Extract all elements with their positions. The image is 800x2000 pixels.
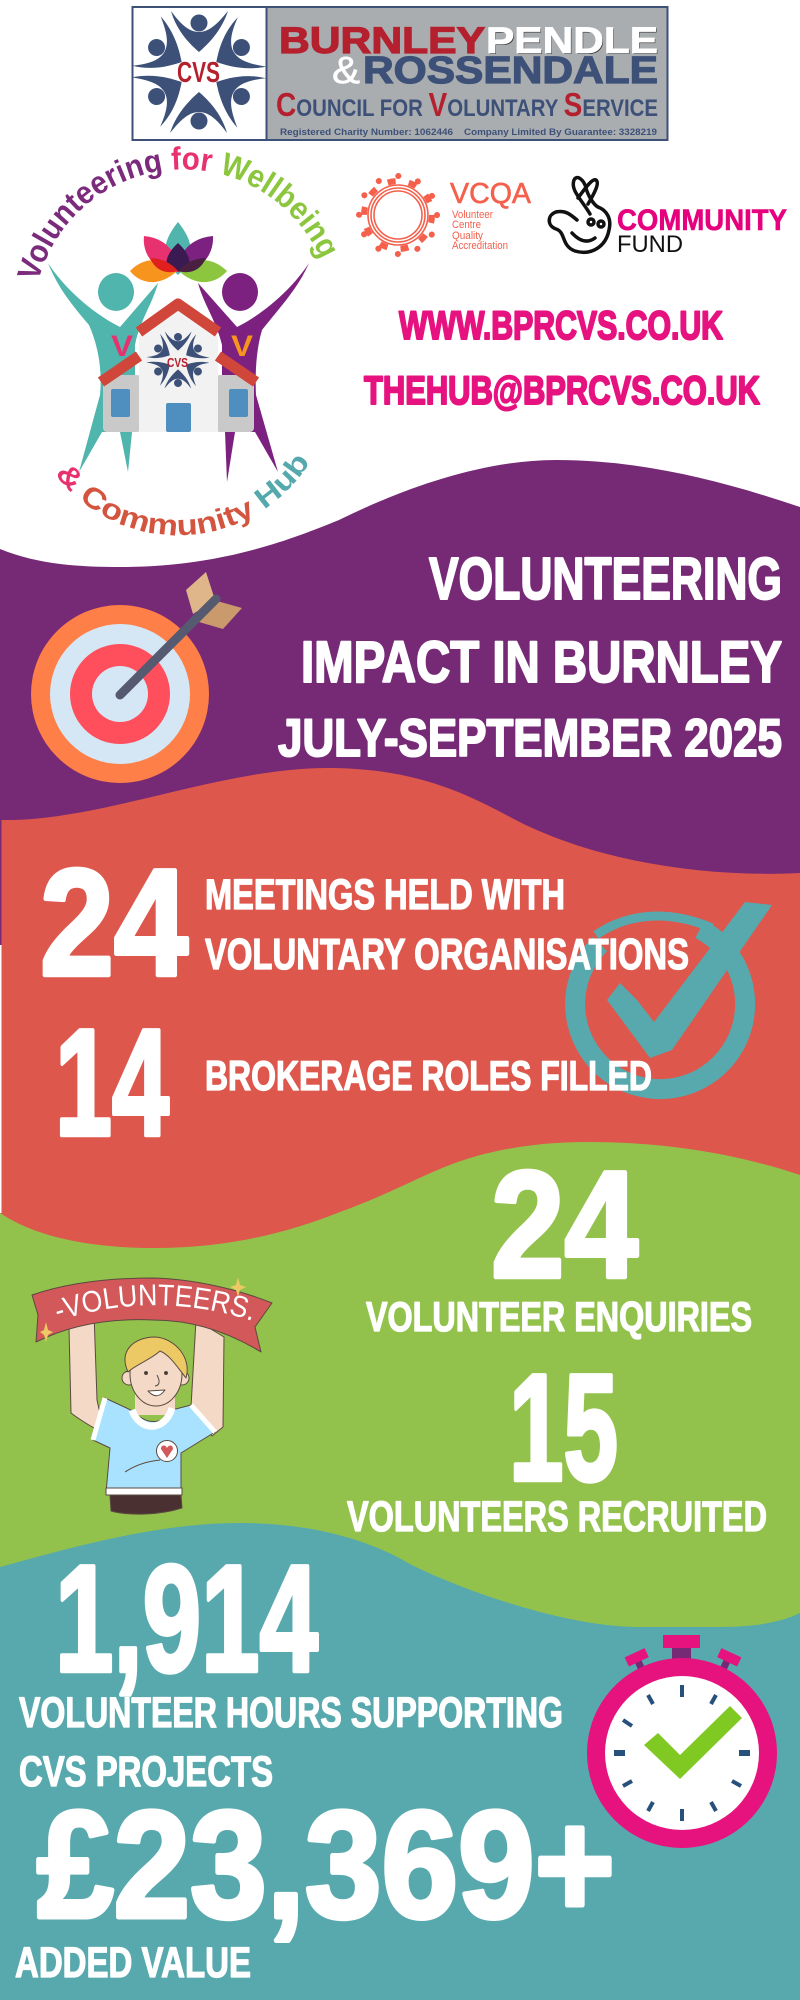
logo: Burnley Pendle and Rossendale CVS: ROSSENDALE [363, 50, 658, 92]
house [101, 304, 256, 432]
letter V orange: V [231, 330, 253, 363]
panel: teal stats band [0, 1523, 800, 2000]
icon: stopwatch with check [587, 1635, 777, 1848]
banner text [56, 1284, 252, 1320]
icon: teal brush check mark [575, 902, 772, 1089]
logo: VCQA: Centre [452, 219, 481, 231]
logo: Burnley Pendle and Rossendale CVS: Registered Charity Number: 1062446 [280, 127, 453, 138]
icon: target with arrow [31, 572, 242, 783]
logo: Burnley Pendle and Rossendale CVS: & [332, 50, 360, 92]
logo: Volunteering for Wellbeing hub [16, 146, 336, 536]
purple figure [198, 263, 309, 482]
illustration: person holding volunteers banner [32, 1277, 272, 1514]
teal figure [48, 263, 158, 472]
stat: 24 enquiries: 24 [491, 1140, 638, 1310]
logo: Burnley Pendle and Rossendale CVS: BURNLEY [279, 20, 485, 61]
banner text: -VOLUNTEERS. [56, 1284, 252, 1320]
panel: red stats band [0, 768, 800, 1300]
label: hours line 2: CVS PROJECTS [19, 1748, 273, 1796]
panel: purple title band [0, 460, 800, 900]
logo: Community Fund: FUND [617, 231, 683, 258]
logo: VCQA: Quality [452, 230, 483, 242]
label: hours line 1: VOLUNTEER HOURS SUPPORTING [19, 1689, 563, 1737]
letter V pink: V [111, 330, 133, 363]
logo: Burnley Pendle and Rossendale CVS [132, 7, 667, 140]
flower [130, 222, 227, 282]
label: added value: ADDED VALUE [15, 1939, 251, 1987]
logo: Community Fund: COMMUNITY [617, 204, 787, 237]
stat: 1,914 hours: 1,914 [55, 1534, 318, 1704]
stat: 14 brokerage: 14 [55, 998, 169, 1168]
logo: Community Fund [549, 178, 787, 258]
label: brokerage: BROKERAGE ROLES FILLED [205, 1052, 652, 1099]
stat: added value amount: £23,369+ [37, 1780, 615, 1950]
logo: VCQA: Accreditation [452, 240, 508, 252]
logo: VCQA: VCQA [450, 178, 532, 210]
house: CVS [167, 355, 188, 370]
logo: Burnley Pendle and Rossendale CVS: CVS [177, 57, 220, 89]
logo: Burnley Pendle and Rossendale CVS: Company Limited By Guarantee: 3328219 [464, 127, 657, 138]
hub title arc: Volunteering for Wellbeing [16, 146, 336, 276]
hub subtitle arc: & Community Hub [58, 456, 308, 536]
logo: Burnley Pendle and Rossendale CVS: COUNCIL FOR VOLUNTARY SERVICE [276, 86, 658, 123]
logo: VCQA: Volunteer [452, 209, 493, 221]
logo: VCQA [359, 176, 532, 254]
stat: 15 recruited: 15 [509, 1343, 618, 1513]
label: meetings line 1: MEETINGS HELD WITH [205, 871, 565, 919]
logo: Burnley Pendle and Rossendale CVS: PENDLE [487, 21, 659, 62]
panel: green stats band [0, 1142, 800, 1650]
stat: 24 meetings: 24 [40, 838, 188, 1008]
logo: Burnley Pendle and Rossendale CVS: PENDLE [486, 20, 658, 61]
